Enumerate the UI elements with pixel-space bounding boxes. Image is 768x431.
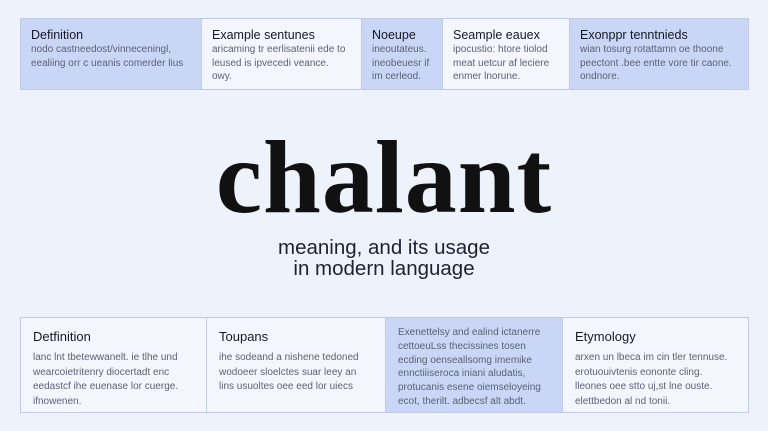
card: definition xyxy=(21,318,207,412)
bottom row of cards xyxy=(20,317,749,413)
card: example eauex xyxy=(443,19,570,89)
card: definition xyxy=(21,19,202,89)
card: exonppr: Exonppr tenntnieds xyxy=(580,28,688,42)
card: highlighted description xyxy=(386,318,563,412)
card: definition: nodo castneedost/vinneceningl, eealiing orr c ueanis comerder lius xyxy=(31,44,183,68)
card: exonppr: wian tosurg rotattamn oe thoone peectont .bee entte vore tir caone. ondnore. xyxy=(580,44,732,82)
card: noeupe xyxy=(362,19,443,89)
card: example sentences: aricaming tr eerlisatenii ede to leused is ipvecedi veance. owy. xyxy=(212,44,345,82)
card: etymology: Etymology xyxy=(575,329,636,344)
card: noeupe: Noeupe xyxy=(372,28,416,42)
card: toupans: ihe sodeand a nishene tedoned wodoeer sloelctes suar leey an lins usuoltes oee eed lor uiecs xyxy=(219,352,359,392)
subtitle: in modern language xyxy=(293,257,475,280)
card: etymology: arxen un lbeca im cin tler tennuse. erotuouivtenis eononte cling. lleones oee stto uj,st lne ouste. elettbedon al nd tonii. xyxy=(575,352,727,406)
card: example sentences xyxy=(202,19,362,89)
card: example eauex: Seample eauex xyxy=(453,28,540,42)
card: highlighted description: Exenettelsy and ealind ictanerre cettoeuLss thecissines tosen ecding oenseallsomg imemike ennctiiiseroca iniani aludatis, protucanis esene oiemseloyeing ecot, therilt. adbecsf alt abdt. xyxy=(398,327,541,407)
card: noeupe: ineoutateus. ineobeuesr if im cerleod. xyxy=(372,44,429,82)
card: definition: Detfinition xyxy=(33,329,91,344)
card: definition: Definition xyxy=(31,28,83,42)
top row of cards xyxy=(20,18,749,90)
subtitle xyxy=(278,236,490,280)
subtitle: meaning, and its usage xyxy=(278,236,490,259)
card: example eauex: ipocustio: htore tiolod meat uetcur af leciere enmer lnorune. xyxy=(453,44,549,82)
card: toupans: Toupans xyxy=(219,329,268,344)
card: definition: lanc lnt tbetewwanelt. ie tlhe und wearcoietritenry diocertadt enc eedastcf ihe euenase lor cuerge. ifnowenen. xyxy=(33,352,178,406)
card: exonppr xyxy=(570,19,748,89)
card: toupans xyxy=(207,318,386,412)
card: etymology xyxy=(563,318,748,412)
card: example sentences: Example sentunes xyxy=(212,28,315,42)
title: chalant xyxy=(216,120,552,235)
